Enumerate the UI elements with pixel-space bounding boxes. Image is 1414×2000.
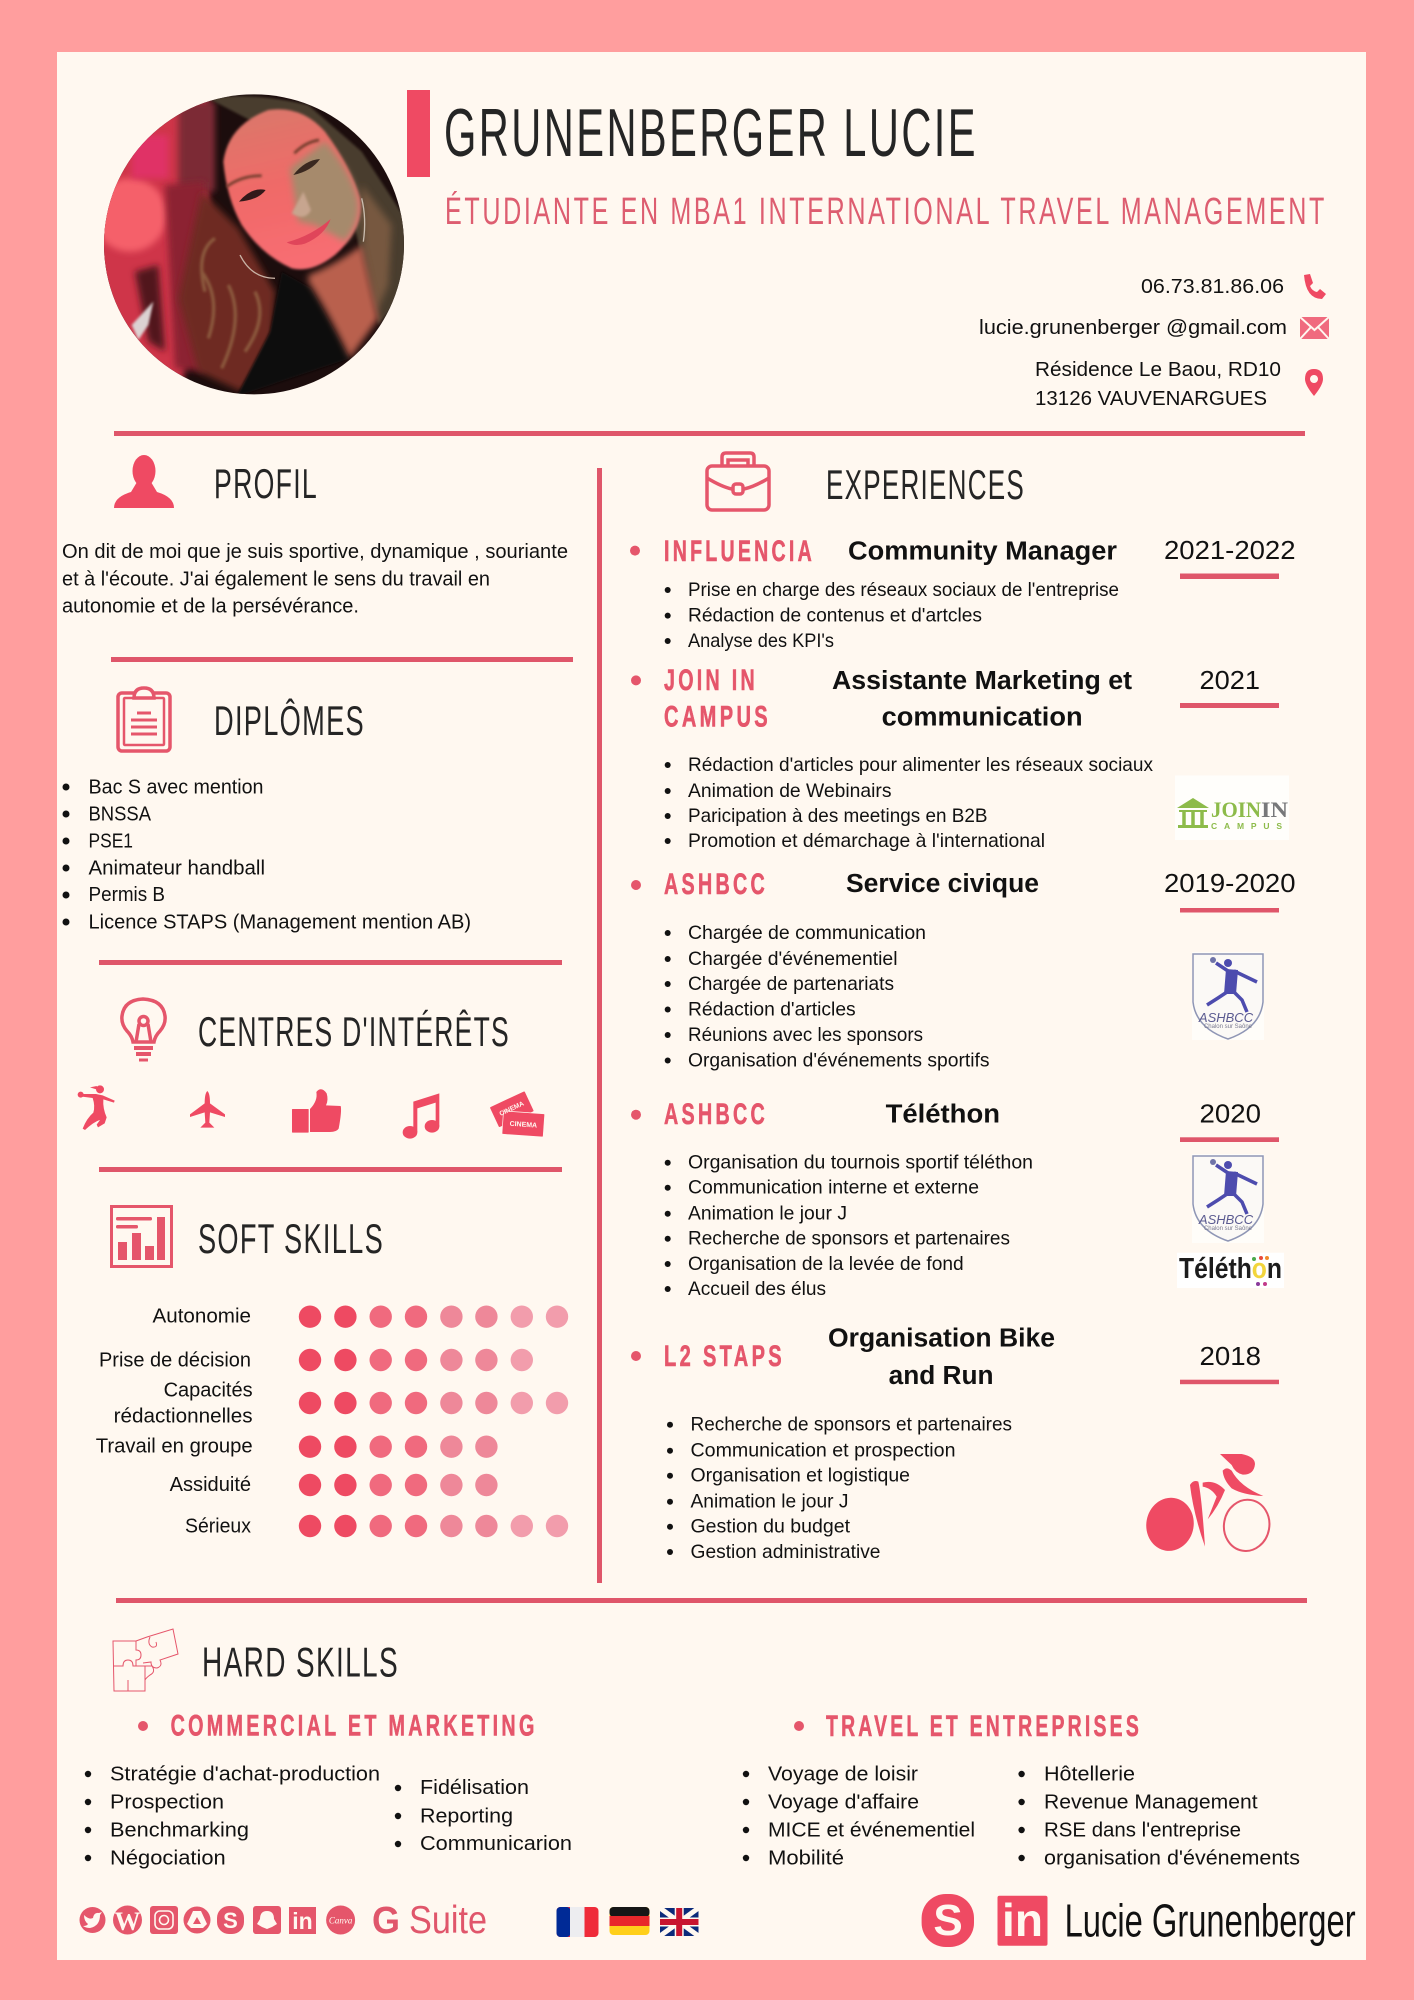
flag: france [556, 1907, 598, 1937]
icon: runner [78, 1085, 115, 1130]
icon: linkedin: in [292, 1908, 313, 1934]
experience: influencia: INFLUENCIA [664, 535, 815, 568]
experience: ashbcc téléthon: Organisation du tournois sportif téléthon [688, 1152, 1033, 1174]
logo: ashbcc [1192, 952, 1264, 1040]
contact details [979, 274, 1329, 410]
icon: person [114, 455, 174, 508]
title: name: GRUNENBERGER LUCIE [444, 95, 978, 171]
column: commercial et marketing: COMMERCIAL ET MARKETING [171, 1710, 538, 1743]
heading: hard skills: HARD SKILLS [202, 1639, 399, 1686]
diplomas list: Bac S avec mention [88, 776, 264, 798]
diplomas list: Animateur handball [88, 858, 265, 880]
column: commercial et marketing: Stratégie d'achat-production [110, 1764, 380, 1786]
icon: canva: Canva [329, 1916, 353, 1926]
experience: influencia [630, 535, 1296, 652]
icon: cinema tickets: CINEMA [509, 1121, 537, 1130]
logo: ashbcc: ASHBCC [1198, 1212, 1254, 1227]
column: commercial et marketing: Négociation [110, 1848, 226, 1870]
experience: l2 staps: and Run [889, 1362, 994, 1390]
experience: join in campus: CAMPUS [664, 700, 771, 734]
icon: linkedin large: in [1002, 1894, 1043, 1946]
column: commercial et marketing: Fidélisation [420, 1777, 529, 1799]
column: travel et entreprises: RSE dans l'entreprise [1044, 1820, 1241, 1842]
diplomas list: BNSSA [88, 804, 152, 826]
experience: join in campus: Rédaction d'articles pour alimenter les réseaux sociaux [688, 754, 1153, 776]
experience: ashbcc service civique: Chargée de partenariats [688, 973, 894, 995]
experience: join in campus: communication [882, 704, 1083, 732]
experience: l2 staps: Organisation et logistique [690, 1465, 910, 1487]
experience: join in campus: Assistante Marketing et [832, 667, 1133, 695]
flag: united kingdom [660, 1908, 698, 1936]
profile text: On dit de moi que je suis sportive, dynamique , souriante [62, 541, 568, 563]
panel: experiences [630, 453, 1296, 1563]
skill labels: Capacités [164, 1379, 253, 1402]
experience: join in campus: Paricipation à des meetings en B2B [688, 805, 988, 827]
experience: ashbcc service civique [631, 868, 1296, 1072]
experience: ashbcc téléthon: Animation le jour J [688, 1203, 847, 1225]
icon: envelope [1300, 317, 1329, 339]
experience: l2 staps: 2018 [1200, 1341, 1261, 1371]
logo: ashbcc [1192, 1154, 1264, 1243]
diplomas list [62, 776, 471, 934]
divider rules [99, 431, 1307, 1603]
diplomas list: PSE1 [88, 830, 133, 852]
g suite logo [372, 1899, 487, 1942]
experience: join in campus: 2021 [1200, 665, 1260, 695]
logo: join in campus [1175, 776, 1289, 840]
column: travel et entreprises [743, 1710, 1300, 1870]
experience: ashbcc téléthon: Téléthon [886, 1101, 1000, 1129]
panel: centres d'intérêts [78, 999, 545, 1139]
contact signature [922, 1894, 1356, 1947]
icon: twitter [80, 1907, 106, 1933]
heading: soft skills: SOFT SKILLS [198, 1215, 384, 1262]
experience: join in campus: JOIN IN [664, 664, 758, 697]
experience: ashbcc téléthon: 2020 [1200, 1099, 1261, 1129]
experience: join in campus: Animation de Webinairs [688, 780, 892, 802]
experience: ashbcc téléthon: Organisation de la levée de fond [688, 1253, 964, 1275]
experience: join in campus [631, 664, 1289, 852]
software icons row [80, 1899, 487, 1942]
experience: ashbcc téléthon: Communication interne et externe [688, 1177, 979, 1199]
icon: light bulb [122, 999, 165, 1060]
column: travel et entreprises: Voyage d'affaire [768, 1792, 919, 1814]
skill labels: Prise de décision [99, 1349, 251, 1372]
g suite logo: Suite [409, 1899, 487, 1942]
skill labels: rédactionnelles [114, 1405, 253, 1428]
experience: ashbcc service civique: 2019-2020 [1164, 868, 1296, 898]
icon: snapchat [253, 1906, 281, 1934]
logo: ashbcc: ASHBCC [1198, 1010, 1254, 1025]
skill labels: Travail en groupe [96, 1435, 253, 1458]
experience: ashbcc service civique: Chargée d'événementiel [688, 948, 898, 970]
skill labels: Sérieux [185, 1515, 252, 1538]
column: travel et entreprises: Revenue Management [1044, 1792, 1258, 1814]
logo: ashbcc: Chalon sur Saône [1204, 1226, 1253, 1232]
diplomas list: Permis B [88, 884, 165, 906]
email: lucie.grunenberger @gmail.com [979, 317, 1287, 339]
panel: soft skills [96, 1205, 568, 1538]
icon: skype large [922, 1894, 974, 1947]
experience: ashbcc téléthon [631, 1098, 1284, 1300]
icon: briefcase [707, 453, 769, 510]
flag: germany [610, 1907, 650, 1935]
experience: l2 staps: Organisation Bike [828, 1325, 1055, 1353]
logo: téléthon: Téléthon [1179, 1253, 1282, 1285]
address: Résidence Le Baou, RD10 [1035, 359, 1281, 381]
icon: pin [1305, 369, 1323, 396]
photo [104, 94, 404, 394]
column: commercial et marketing: Prospection [110, 1792, 224, 1814]
icon: plane [190, 1091, 225, 1128]
address: 13126 VAUVENARGUES [1035, 388, 1267, 410]
skill labels: Autonomie [152, 1305, 251, 1328]
icon: thumbs up [292, 1089, 341, 1133]
profile text: et à l'écoute. J'ai également le sens du travail en [62, 568, 490, 590]
icon: canva [326, 1906, 355, 1934]
icon: cinema tickets [490, 1091, 545, 1137]
phone: 06.73.81.86.06 [1141, 276, 1284, 298]
heading: experiences: EXPERIENCES [826, 461, 1025, 508]
logo: ashbcc: Chalon sur Saône [1204, 1024, 1253, 1030]
icon: skype [217, 1906, 244, 1934]
experience: l2 staps: Gestion du budget [690, 1516, 851, 1538]
experience: influencia: Analyse des KPI's [688, 630, 834, 652]
icon: wordpress: W [114, 1907, 140, 1936]
experience: influencia: Prise en charge des réseaux sociaux de l'entreprise [688, 579, 1119, 601]
icon: cyclist [1142, 1454, 1273, 1555]
experience: ashbcc service civique: Organisation d'événements sportifs [688, 1050, 990, 1072]
icon: phone [1304, 274, 1326, 299]
icon: puzzle [113, 1629, 178, 1691]
experience: ashbcc service civique: Rédaction d'articles [688, 998, 856, 1020]
column: commercial et marketing [85, 1710, 572, 1870]
icon: cinema tickets: CINEMA [498, 1100, 525, 1118]
heading: diplômes: DIPLÔMES [214, 697, 365, 744]
experience: l2 staps: Recherche de sponsors et partenaires [690, 1414, 1012, 1436]
experience: ashbcc service civique: Réunions avec les sponsors [688, 1024, 923, 1046]
skill labels: Assiduité [170, 1473, 251, 1496]
experience: influencia: Community Manager [848, 538, 1117, 566]
name accent bar [407, 90, 430, 177]
experience: influencia: Rédaction de contenus et d'artcles [688, 605, 982, 627]
icon: skype large: S [933, 1896, 963, 1945]
icon: instagram [150, 1906, 178, 1934]
column: commercial et marketing: Communicarion [420, 1833, 572, 1855]
address [1035, 359, 1281, 410]
column: travel et entreprises: Hôtellerie [1044, 1764, 1135, 1786]
icon: clipboard [118, 688, 170, 751]
icon: drive [184, 1906, 210, 1934]
experience: ashbcc service civique: ASHBCC [664, 868, 768, 901]
experience: ashbcc téléthon: Recherche de sponsors et partenaires [688, 1228, 1010, 1250]
experience: ashbcc service civique: Service civique [846, 870, 1039, 898]
skill dot ratings [299, 1306, 568, 1537]
heading: centres d'intérêts: CENTRES D'INTÉRÊTS [198, 1008, 510, 1055]
experience: l2 staps: Gestion administrative [690, 1541, 880, 1563]
interest icons [78, 1085, 545, 1139]
icon: music note [403, 1093, 439, 1139]
experience: l2 staps: Communication et prospection [690, 1440, 956, 1462]
experience: ashbcc téléthon: Accueil des élus [688, 1278, 826, 1300]
experience: join in campus: Promotion et démarchage à l'international [688, 830, 1045, 852]
profile text [62, 541, 568, 618]
icon: chart report [110, 1205, 173, 1268]
logo: join in campus: CAMPUS [1211, 821, 1288, 831]
experience: ashbcc téléthon: ASHBCC [664, 1098, 768, 1131]
logo: join in campus: JOIN [1211, 797, 1261, 822]
column: commercial et marketing: Benchmarking [110, 1820, 249, 1842]
icon: skype: S [223, 1908, 238, 1933]
column: travel et entreprises: Mobilité [768, 1848, 844, 1870]
experience: influencia: 2021-2022 [1164, 535, 1296, 565]
column: travel et entreprises: MICE et événementiel [768, 1820, 975, 1842]
column: travel et entreprises: organisation d'événements [1044, 1848, 1300, 1870]
experience: l2 staps: L2 STAPS [664, 1340, 785, 1373]
column: commercial et marketing: Reporting [420, 1805, 513, 1827]
logo: join in campus: IN [1261, 797, 1288, 822]
g suite logo: G [372, 1900, 400, 1942]
experience: ashbcc service civique: Chargée de communication [688, 922, 926, 944]
panel: hard skills [85, 1629, 1300, 1870]
diplomas list: Licence STAPS (Management mention AB) [88, 912, 471, 934]
experience: l2 staps [631, 1325, 1279, 1563]
flags [556, 1907, 698, 1937]
column: travel et entreprises: Voyage de loisir [768, 1764, 918, 1786]
profile text: autonomie et de la persévérance. [62, 596, 359, 618]
panel: diplômes [62, 688, 471, 934]
panel: profil [62, 455, 568, 618]
experience: l2 staps: Animation le jour J [690, 1491, 848, 1513]
skill labels [96, 1305, 253, 1538]
heading: profil: PROFIL [214, 460, 318, 507]
column: travel et entreprises: TRAVEL ET ENTREPRISES [826, 1710, 1142, 1743]
